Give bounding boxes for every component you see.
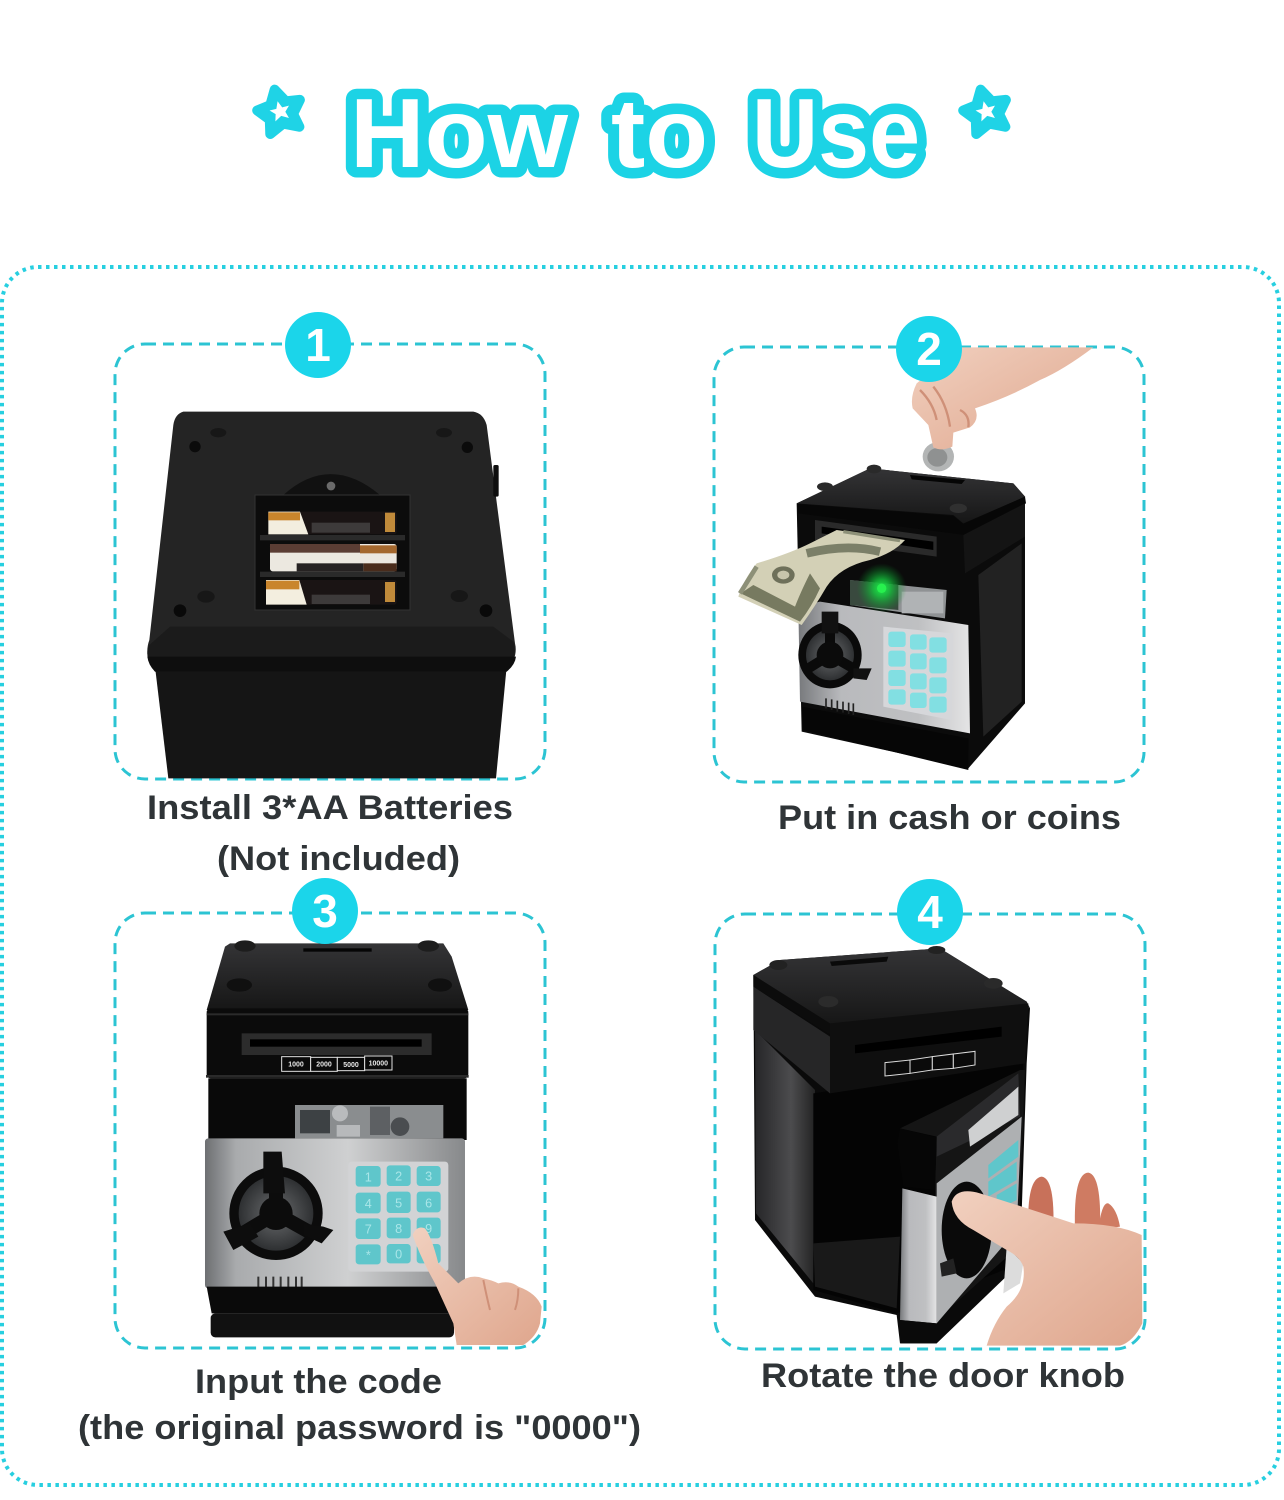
step badge 1: 1 bbox=[305, 319, 331, 371]
photo: entering the code: 5 bbox=[395, 1196, 402, 1210]
photo: entering the code: 5000 bbox=[343, 1062, 359, 1069]
step badge 3: 3 bbox=[312, 885, 338, 937]
caption: step 1: (Not included) bbox=[217, 840, 460, 878]
photo: entering the code: 10000 bbox=[369, 1061, 388, 1068]
photo: entering the code: 4 bbox=[365, 1197, 372, 1211]
photo: entering the code: 2000 bbox=[316, 1062, 332, 1069]
title: How to Use bbox=[253, 78, 1012, 188]
icon: left star bbox=[253, 84, 306, 136]
photo: entering the code: 1000 bbox=[288, 1062, 304, 1069]
panel: step 4 bbox=[715, 914, 1145, 1349]
photo: entering the code: 1 bbox=[365, 1170, 372, 1184]
photo: piggy bank with cash and coin bbox=[738, 347, 1093, 770]
photo: entering the code: 6 bbox=[425, 1196, 432, 1210]
photo: entering the code: 8 bbox=[395, 1222, 402, 1236]
dashed frame 3 bbox=[115, 913, 545, 1348]
step badge 2 bbox=[896, 316, 962, 382]
step badge 1 bbox=[285, 312, 351, 378]
photo: battery compartment underside bbox=[147, 412, 516, 778]
photo: entering the code: 2 bbox=[395, 1170, 402, 1184]
panel: step 3 bbox=[115, 913, 545, 1348]
step badge 3 bbox=[292, 878, 358, 944]
caption: step 2: Put in cash or coins bbox=[778, 799, 1121, 837]
photo: entering the code: 9 bbox=[425, 1222, 432, 1236]
caption: step 1: Install 3*AA Batteries bbox=[147, 789, 513, 827]
caption: step 4: Rotate the door knob bbox=[761, 1357, 1125, 1395]
title word: How: How bbox=[350, 78, 569, 188]
caption: step 1 bbox=[147, 789, 513, 878]
photo: entering the code: 0 bbox=[395, 1248, 402, 1262]
step badge 2: 2 bbox=[916, 323, 942, 375]
caption: step 3: (the original password is "0000") bbox=[78, 1409, 641, 1447]
step badge 4: 4 bbox=[917, 886, 943, 938]
dashed frame 1 bbox=[115, 344, 545, 779]
photo: rotating the door knob bbox=[753, 946, 1142, 1346]
panel: step 1 bbox=[115, 344, 545, 779]
step badge 4 bbox=[897, 879, 963, 945]
caption: step 3 bbox=[78, 1363, 641, 1447]
caption: step 3: Input the code bbox=[195, 1363, 442, 1401]
photo: entering the code: 3 bbox=[425, 1170, 432, 1184]
dashed frame 4 bbox=[715, 914, 1145, 1349]
dashed frame 2 bbox=[714, 347, 1144, 782]
title word: to: to bbox=[611, 78, 708, 188]
photo: entering the code: 7 bbox=[365, 1223, 372, 1237]
photo: entering the code: * bbox=[366, 1248, 371, 1262]
title word: Use: Use bbox=[752, 78, 920, 188]
panel: step 2 bbox=[714, 347, 1144, 782]
icon: right star bbox=[959, 84, 1012, 136]
photo: entering the code bbox=[205, 940, 542, 1345]
